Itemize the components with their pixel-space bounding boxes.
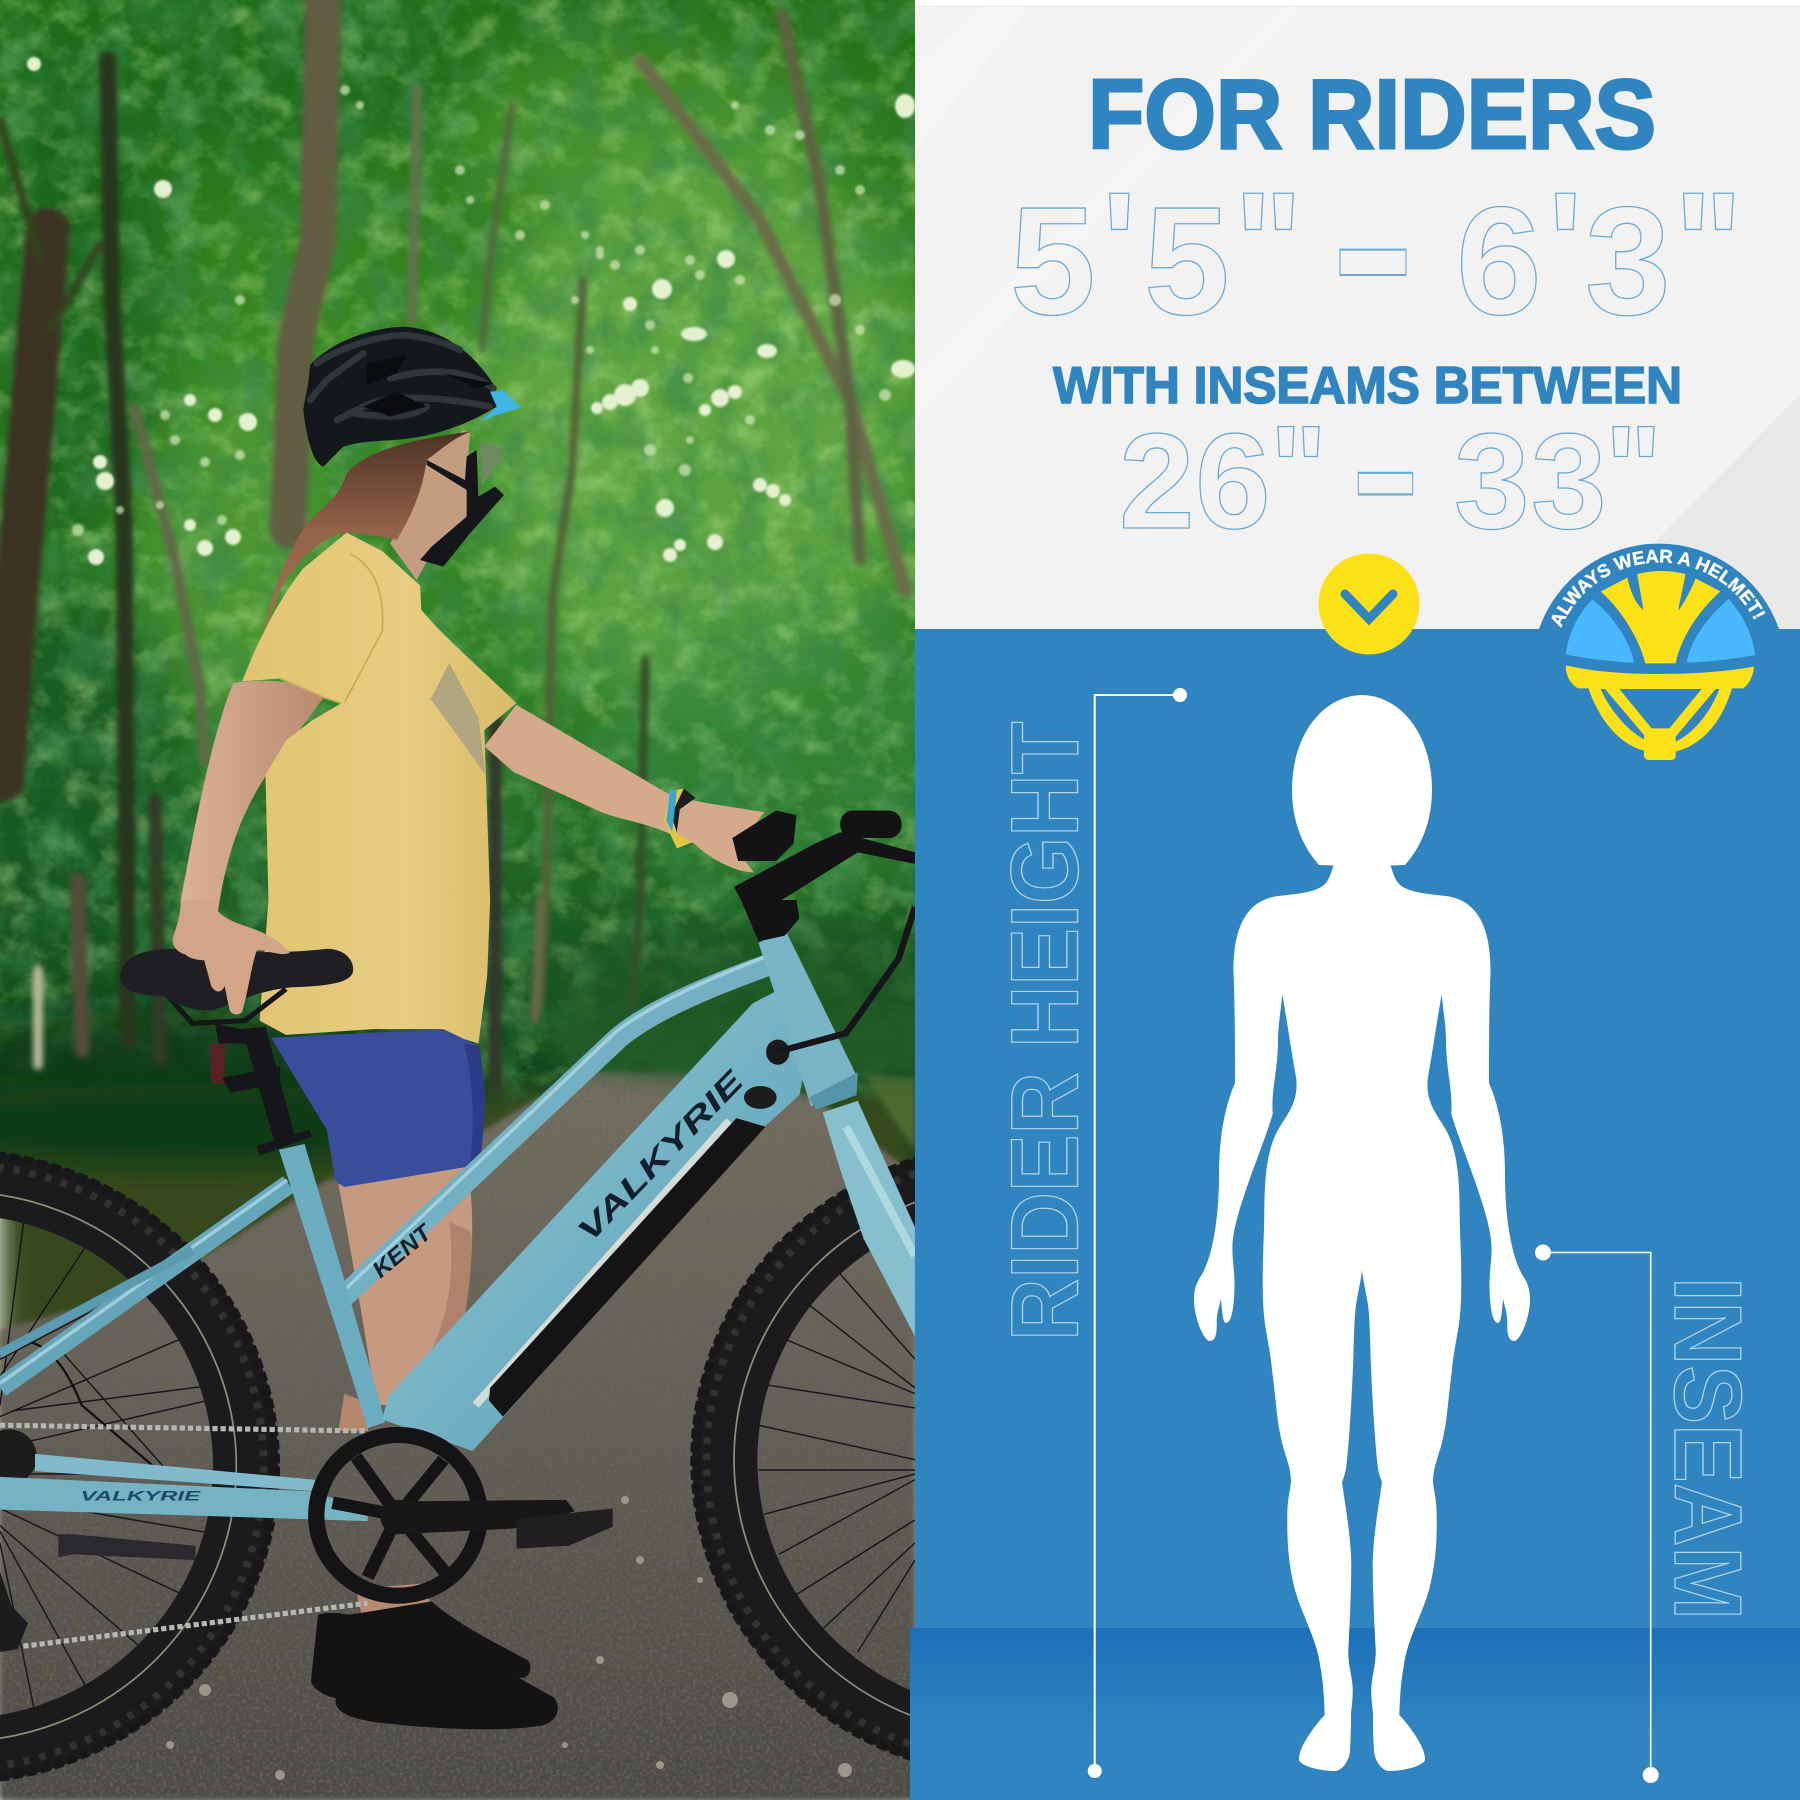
- subheading: with inseams between: WITH INSEAMS BETWEEN: [1053, 357, 1682, 415]
- saddle: [120, 949, 353, 1010]
- label: rider height: RIDER HEIGHT: [992, 722, 1099, 1341]
- inseam range dash: –: [1355, 347, 1416, 589]
- tree trunks: [0, 0, 905, 1090]
- left arm: [180, 681, 324, 918]
- outlined height range: 5563: [1010, 175, 1671, 347]
- model name on top tube: KENT: [367, 1218, 438, 1283]
- bokeh light spots: [27, 57, 915, 565]
- rear wheel: [0, 1153, 275, 1780]
- frame lettering: VALKYRIE: [571, 1064, 751, 1248]
- seat post and clamp: [169, 989, 312, 1155]
- T-shirt: [242, 533, 516, 1044]
- glasses: [480, 442, 502, 485]
- panel: rider height ranges (light background): [915, 0, 1800, 640]
- handlebar, display and cables: [732, 810, 915, 1052]
- badge curved text: ALWAYS WEAR A HELMET!: [1551, 549, 1766, 628]
- head: neck, hair, strap, helmet: [263, 327, 522, 633]
- height range dash: –: [1336, 101, 1410, 386]
- outlined inseam range: [1119, 347, 1662, 589]
- inseam inch marks: "": [1270, 401, 1662, 535]
- ground: grass and gravel road: [0, 1009, 970, 1800]
- panel: blue measurement area: [915, 629, 1800, 1800]
- heading: for riders: FOR RIDERS: [1088, 59, 1656, 169]
- inseam measurement line: [1535, 1244, 1659, 1783]
- hair: [263, 432, 470, 633]
- brand on chain stay: VALKYRIE: [81, 1488, 201, 1503]
- outlined inseam range: 2633: [1119, 405, 1607, 557]
- label: inseam: INSEAM: [1654, 1277, 1761, 1620]
- icon: yellow down chevron button: [1318, 554, 1420, 654]
- height range feet and inch marks: '"'": [1102, 162, 1743, 324]
- bike frame, drivetrain and saddle: [0, 900, 915, 1646]
- shorts: [271, 1029, 485, 1187]
- rider height measurement line: [1088, 688, 1187, 1778]
- floor band: [910, 1628, 1800, 1800]
- shoes: [311, 1601, 558, 1729]
- helmet icon: [1566, 571, 1755, 760]
- right arm and hand: [484, 705, 764, 872]
- badge: always wear a helmet: [1539, 544, 1779, 760]
- neck: [390, 430, 480, 580]
- pebbles: [166, 1496, 852, 1780]
- photo: rider with e-bike in forest: [0, 0, 915, 1800]
- frame tubes: [0, 929, 915, 1521]
- wheels, legs, shorts and shoes: [0, 1029, 915, 1782]
- outlined height range: [1010, 101, 1743, 386]
- chin strap: [420, 450, 504, 567]
- cassette and derailleur: [0, 1429, 195, 1652]
- forest background: [0, 0, 915, 1164]
- chain: [0, 1425, 368, 1646]
- front wheel: [690, 1156, 915, 1761]
- rider upper body: [180, 533, 764, 1044]
- icon: human silhouette: [1194, 695, 1530, 1771]
- helmet: [303, 327, 522, 467]
- chainring and crank: [316, 1435, 613, 1596]
- hand on saddle: [173, 900, 290, 1015]
- back leg and thigh: [338, 1164, 472, 1405]
